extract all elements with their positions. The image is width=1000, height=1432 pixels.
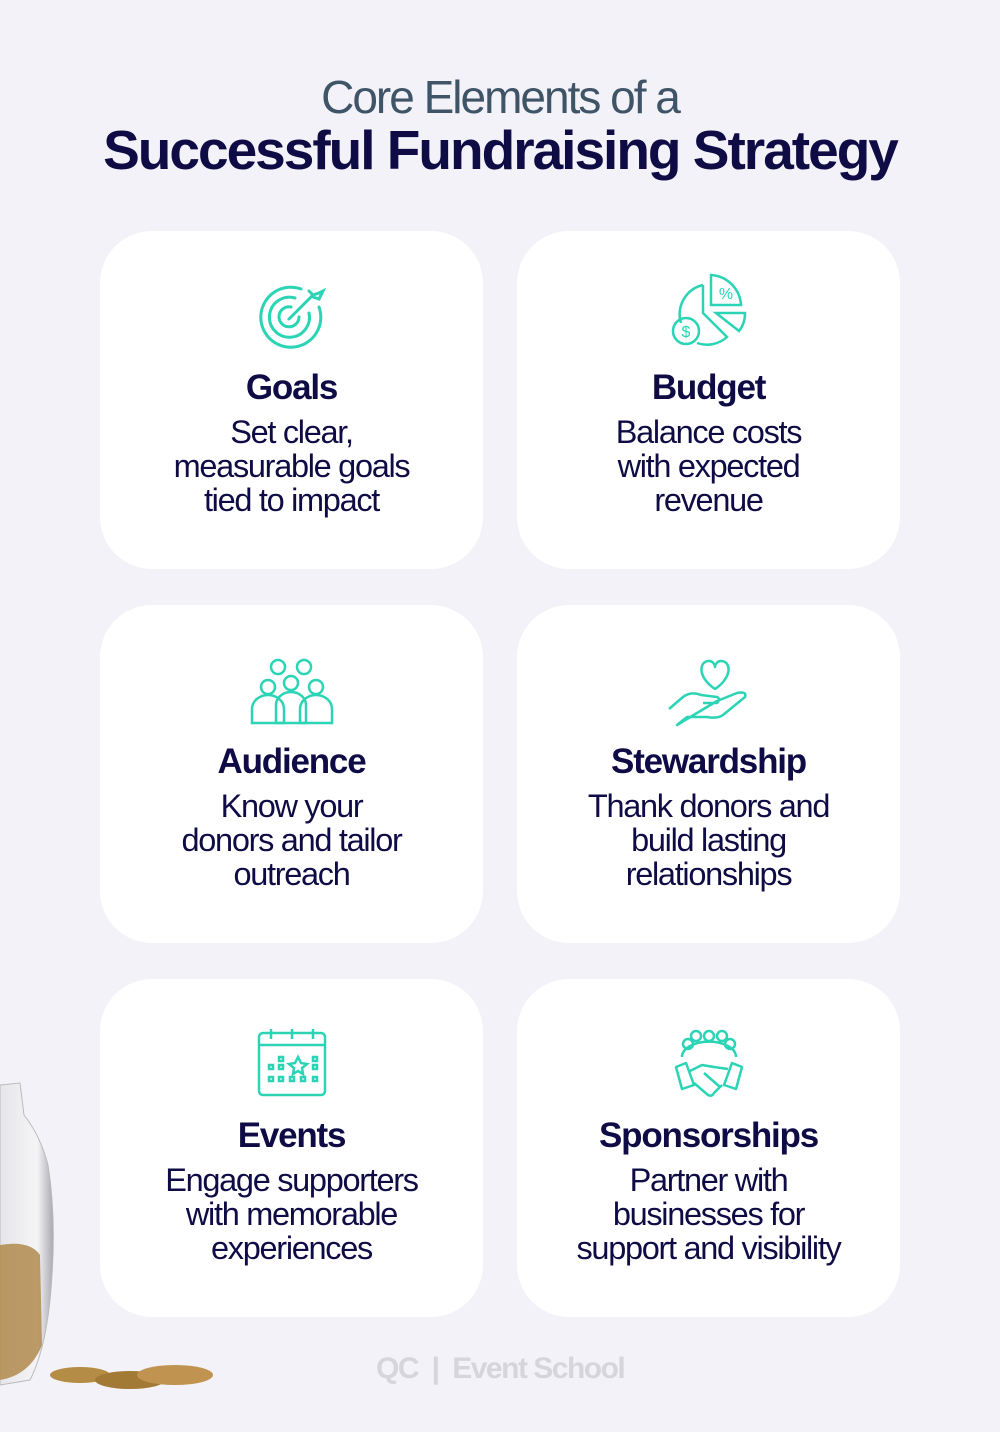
icon: pie chart: % xyxy=(718,286,733,303)
icon: people group xyxy=(250,658,334,724)
icon: heart in hand xyxy=(668,660,747,726)
card: Budget xyxy=(517,231,900,569)
card: Events: Engage supporters xyxy=(165,1162,418,1198)
card: Audience: outreach xyxy=(233,856,350,892)
icon: pie chart: $ xyxy=(681,324,690,341)
text: Successful Fundraising Strategy xyxy=(103,119,897,181)
card: Sponsorships: Partner with xyxy=(630,1162,787,1198)
title xyxy=(103,71,898,181)
card: Stewardship: Thank donors and xyxy=(588,788,829,824)
icon: calendar xyxy=(258,1029,326,1096)
card: Stewardship: Stewardship xyxy=(611,742,806,781)
icon: pie chart xyxy=(672,274,746,346)
card: Budget: Budget xyxy=(652,368,765,407)
card: Sponsorships: Sponsorships xyxy=(599,1116,818,1155)
card: Budget: with expected xyxy=(618,448,799,484)
icon: target xyxy=(259,286,326,349)
card: Budget: Balance costs xyxy=(616,414,801,450)
card: Events: with memorable xyxy=(186,1196,397,1232)
card: Sponsorships: businesses for xyxy=(613,1196,804,1232)
card: Sponsorships xyxy=(517,979,900,1317)
card: Stewardship xyxy=(517,605,900,943)
card: Goals: measurable goals xyxy=(174,448,409,484)
card: Goals xyxy=(100,231,483,569)
footer logo: QC | Event School xyxy=(376,1352,624,1385)
icon: handshake with people xyxy=(674,1030,744,1097)
card: Audience: donors and tailor xyxy=(182,822,402,858)
card: Goals: Set clear, xyxy=(230,414,353,450)
card: Events: Events xyxy=(238,1116,345,1155)
card: Goals: tied to impact xyxy=(204,482,379,518)
card: Audience xyxy=(100,605,483,943)
text: Core Elements of a xyxy=(321,71,679,123)
card: Events: experiences xyxy=(211,1230,372,1266)
card: Events xyxy=(100,979,483,1317)
card: Sponsorships: support and visibility xyxy=(576,1230,841,1266)
card: Audience: Know your xyxy=(221,788,362,824)
card: Stewardship: build lasting xyxy=(631,822,786,858)
card: Goals: Goals xyxy=(246,368,337,407)
card: Budget: revenue xyxy=(654,482,763,518)
card: Audience: Audience xyxy=(218,742,365,781)
card: Stewardship: relationships xyxy=(626,856,791,892)
jar image xyxy=(0,1082,213,1389)
